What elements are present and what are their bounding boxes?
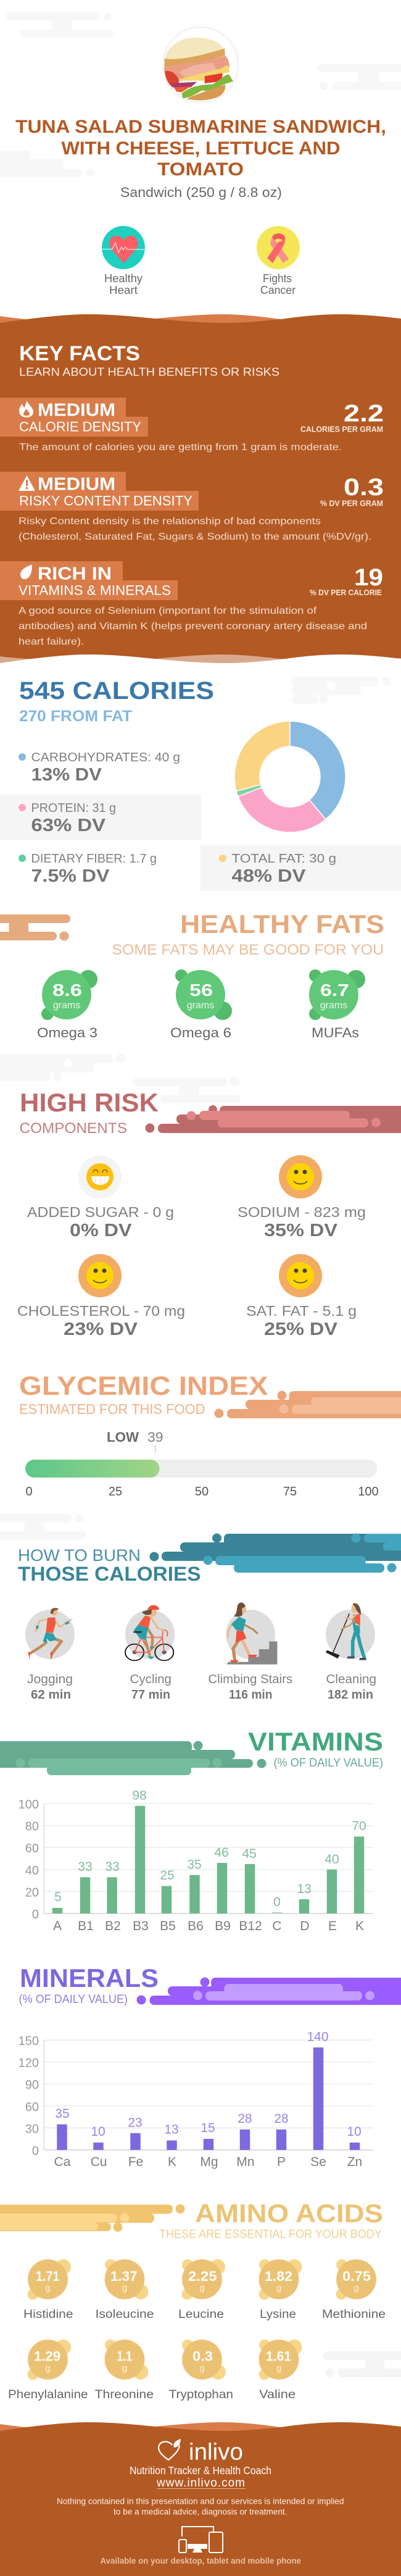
risk item: sodium: 35% DV [264, 1221, 338, 1240]
amino badge: phenylalanine: 1.29 [34, 2349, 60, 2364]
bar chart: minerals: Ca [54, 2155, 71, 2169]
fact: rich in vitamins and minerals: VITAMINS & MINERALS [19, 583, 171, 598]
fact: risky content density: RISKY CONTENT DENSITY [19, 493, 192, 509]
bar chart: minerals: 90 [25, 2078, 39, 2092]
background cloud: burn [0, 1514, 86, 1540]
risk item: sodium: SODIUM - 823 mg [238, 1204, 366, 1220]
bar chart: vitamins: 35 [187, 1858, 202, 1872]
heading: high risk: HIGH RISK [20, 1088, 159, 1117]
bar chart: minerals: Mg [200, 2155, 218, 2169]
fact: risky content density [0, 472, 384, 542]
amino badge: histidine [23, 2259, 73, 2321]
amino badge: methionine: 0.75 [342, 2269, 371, 2284]
disclaimer [57, 2496, 344, 2517]
bar chart: minerals: 150 [19, 2034, 39, 2048]
fact: calorie density: MEDIUM [38, 400, 115, 420]
tagline: Nutrition Tracker & Health Coach [130, 2464, 271, 2477]
fat badge: omega 3: grams [53, 1000, 80, 1011]
bar chart: vitamins: 45 [242, 1847, 257, 1861]
decoration: vitamins banner [0, 1741, 267, 1775]
stat: carbohydrates: CARBOHYDRATES: 40 g [31, 751, 180, 764]
fact: rich in vitamins and minerals [0, 561, 383, 647]
icon: healthy heart: Healthy [104, 272, 143, 285]
title: TOMATO [157, 159, 244, 180]
amino badge: methionine: g [353, 2283, 359, 2293]
bar chart: vitamins: B3 [133, 1919, 149, 1933]
bar chart: vitamins: 98 [132, 1789, 147, 1803]
donut chart: macronutrients [234, 721, 345, 832]
amino badge: methionine [322, 2259, 386, 2321]
bar chart: minerals: K [168, 2155, 176, 2169]
bar chart: vitamins: 70 [352, 1819, 366, 1833]
amino badge: tryptophan [169, 2340, 233, 2401]
amino badge: isoleucine: g [122, 2283, 127, 2293]
heading: high risk: COMPONENTS [20, 1120, 127, 1137]
amino badge: lysine: Lysine [260, 2308, 296, 2321]
bar chart: minerals: 140 [307, 2030, 329, 2044]
amino badge: histidine: g [45, 2283, 51, 2293]
heading: amino acids: THESE ARE ESSENTIAL FOR YOUR BODY [159, 2228, 382, 2241]
gauge: glycemic index: 75 [283, 1485, 297, 1499]
bar chart: vitamins: 25 [160, 1868, 175, 1883]
heading: minerals: (% OF DAILY VALUE) [19, 1993, 128, 2006]
fat badge: MUFAs: MUFAs [312, 1025, 359, 1040]
row highlight: protein [0, 795, 201, 840]
bar chart: minerals: 10 [347, 2125, 362, 2139]
amino badge: leucine: Leucine [178, 2308, 224, 2321]
food photo: sandwich [163, 27, 238, 102]
amino badge: valine: g [276, 2363, 281, 2373]
logo: inlivo: inlivo [189, 2439, 243, 2465]
amino badge: isoleucine: Isoleucine [95, 2308, 154, 2321]
bar chart: vitamins: A [53, 1919, 62, 1933]
fact: risky content density: (Cholesterol, Saturated Fat, Sugars & Sodium) to the amount (%DV/gr). [19, 532, 371, 542]
bar chart: vitamins: K [355, 1919, 364, 1933]
amino badge: isoleucine: 1.37 [110, 2269, 137, 2284]
amino badge: valine: Valine [259, 2388, 296, 2401]
activity: cleaning: Cleaning [326, 1673, 376, 1686]
gauge: glycemic index: 100 [358, 1485, 379, 1499]
bar chart: minerals: 28 [274, 2112, 289, 2126]
bar chart: vitamins: 40 [325, 1852, 339, 1867]
risk item: cholesterol: 23% DV [64, 1319, 138, 1339]
heading: healthy fats: SOME FATS MAY BE GOOD FOR YOU [112, 942, 384, 958]
fact: rich in vitamins and minerals: RICH IN [38, 564, 112, 584]
icon: warning triangle [19, 475, 35, 491]
background cloud: amino acids [323, 2351, 401, 2377]
bar chart: vitamins: 13 [297, 1882, 312, 1896]
bar chart: vitamins: 40 [25, 1864, 39, 1878]
activity: climbing stairs: Climbing Stairs [209, 1673, 292, 1686]
fact: rich in vitamins and minerals: % DV PER CALORIE [310, 588, 382, 597]
gauge: glycemic index: LOW [107, 1429, 139, 1445]
risk item: saturated fat: SAT. FAT - 5.1 g [246, 1303, 357, 1319]
risk item: sodium [238, 1155, 366, 1240]
amino badge: histidine: Histidine [23, 2308, 73, 2321]
amino badge: tryptophan: 0.3 [192, 2349, 213, 2364]
bar chart: minerals: 13 [164, 2123, 179, 2136]
fact: risky content density: MEDIUM [38, 474, 115, 494]
fat badge: omega 3: 8.6 [52, 981, 82, 1000]
heading: calories: 270 FROM FAT [19, 708, 132, 725]
bar chart: vitamins: 20 [25, 1886, 39, 1899]
fact: rich in vitamins and minerals: heart failure). [19, 637, 84, 647]
icon: devices [179, 2527, 223, 2553]
fact: calorie density: CALORIES PER GRAM [300, 425, 383, 433]
bar chart: vitamins: 46 [214, 1846, 229, 1860]
bar chart: vitamins: B5 [160, 1919, 176, 1933]
fat badge: omega 6: Omega 6 [170, 1025, 231, 1040]
serving size: Sandwich (250 g / 8.8 oz) [120, 185, 282, 200]
amino badge: lysine: g [276, 2283, 281, 2293]
activity: cycling: 77 min [131, 1688, 170, 1702]
heading: how to burn [18, 1546, 201, 1585]
bar chart: vitamins: 60 [25, 1842, 39, 1855]
bar chart: vitamins: 0 [273, 1895, 281, 1909]
bar chart: vitamins: B9 [215, 1919, 231, 1933]
bar chart: minerals: 0 [32, 2144, 39, 2158]
bar chart: vitamins: B1 [78, 1919, 94, 1933]
risk item: added sugar: ADDED SUGAR - 0 g [27, 1204, 174, 1220]
heading: calories [19, 677, 214, 725]
gauge: glycemic index: 0 [25, 1485, 33, 1499]
amino badge: isoleucine [95, 2259, 154, 2321]
decoration: high risk banner [146, 1105, 401, 1133]
bar chart: minerals [19, 2030, 373, 2169]
fat badge: omega 3 [37, 970, 97, 1040]
heading: glycemic index: GLYCEMIC INDEX [19, 1371, 268, 1401]
heading: how to burn: HOW TO BURN [18, 1546, 141, 1565]
heading: vitamins: VITAMINS [248, 1727, 383, 1756]
title: WITH CHEESE, LETTUCE AND [62, 138, 341, 159]
heading: high risk [20, 1088, 159, 1137]
bar chart: vitamins: 80 [25, 1820, 39, 1834]
panel: calories [0, 677, 401, 891]
stat: protein: 63% DV [31, 816, 106, 835]
icon: fights cancer [257, 226, 300, 296]
bar chart: minerals: Zn [347, 2155, 362, 2169]
decoration: glycemic banner [215, 1390, 401, 1418]
gauge: glycemic index: 39 [147, 1429, 163, 1445]
stat: total fat [219, 852, 336, 886]
amino badge: tryptophan: Tryptophan [169, 2388, 233, 2401]
fact: calorie density: CALORIE DENSITY [19, 419, 141, 435]
amino badge: leucine [178, 2259, 225, 2321]
activity: cleaning [326, 1604, 376, 1702]
fact: calorie density [0, 398, 384, 453]
fat badge: MUFAs: grams [320, 1000, 347, 1011]
decoration: healthy fats banner [0, 914, 70, 941]
fat badge: omega 6: 56 [189, 981, 213, 1000]
bar chart: minerals: 15 [200, 2121, 215, 2135]
bar chart: minerals: 120 [19, 2057, 39, 2070]
activity: jogging [25, 1608, 75, 1702]
bar chart: vitamins: B2 [105, 1919, 121, 1933]
fat badge: MUFAs [309, 969, 365, 1040]
icon: healthy heart [102, 226, 145, 296]
heading: healthy fats: HEALTHY FATS [180, 910, 384, 939]
bar chart: vitamins: 33 [78, 1860, 93, 1874]
heading: vitamins: (% OF DAILY VALUE) [274, 1757, 383, 1770]
activity: jogging: 62 min [31, 1688, 71, 1702]
gauge: glycemic index: 50 [195, 1485, 209, 1499]
gauge: glycemic index: 25 [109, 1485, 122, 1499]
risk item: saturated fat [246, 1254, 357, 1339]
gauge: glycemic index [25, 1429, 379, 1499]
fact: rich in vitamins and minerals: 19 [354, 564, 383, 591]
risk item: saturated fat: 25% DV [264, 1319, 338, 1339]
decoration: amino acids banner [0, 2204, 185, 2231]
bar chart: minerals: Se [310, 2155, 326, 2169]
bar chart: minerals: Fe [128, 2155, 143, 2169]
fat badge: omega 6 [170, 969, 232, 1040]
bar chart: minerals: 28 [238, 2112, 252, 2126]
amino badge: phenylalanine: g [45, 2363, 51, 2373]
bar chart: vitamins: 0 [32, 1908, 39, 1922]
bar chart: minerals: 35 [55, 2107, 70, 2121]
bar chart: minerals: 30 [25, 2122, 39, 2136]
activity: climbing stairs [209, 1602, 292, 1702]
activity: jogging: Jogging [27, 1673, 73, 1686]
background cloud: calories [292, 677, 391, 704]
fact: risky content density: 0.3 [344, 474, 384, 501]
risk item: added sugar [27, 1155, 174, 1240]
amino badge: valine: 1.61 [266, 2349, 291, 2364]
website link: www.inlivo.com [156, 2477, 245, 2490]
risk item: added sugar: 0% DV [70, 1221, 132, 1240]
bar chart: vitamins: B6 [188, 1919, 204, 1933]
icon: leaf [20, 564, 32, 579]
decoration: minerals banner [137, 1977, 401, 2005]
amino badge: methionine: Methionine [322, 2308, 386, 2321]
activity: cycling [125, 1605, 175, 1702]
stat: total fat: TOTAL FAT: 30 g [232, 852, 336, 866]
disclaimer: to be a medical advice, diagnosis or treatment. [114, 2507, 287, 2517]
stat: dietary fiber: 7.5% DV [31, 866, 110, 886]
bar chart: vitamins: E [328, 1919, 337, 1933]
heading: key facts [19, 342, 279, 378]
fact: calorie density: The amount of calories you are getting from 1 gram is moderate. [19, 442, 342, 453]
bar chart: minerals: Cu [91, 2155, 107, 2169]
fat badge: omega 6: grams [187, 1000, 214, 1011]
title [15, 117, 386, 180]
decoration: burn banner [149, 1534, 401, 1573]
stat: carbohydrates [19, 751, 180, 785]
icon: flame [19, 401, 33, 417]
panel: footer [0, 2422, 401, 2576]
bar chart: vitamins: 100 [19, 1798, 39, 1812]
heading: minerals: MINERALS [20, 1963, 159, 1993]
activity: cycling: Cycling [130, 1673, 172, 1686]
title: TUNA SALAD SUBMARINE SANDWICH, [15, 117, 386, 137]
icon: fights cancer: Cancer [260, 284, 296, 296]
heading: amino acids [159, 2199, 383, 2241]
logo: inlivo [159, 2439, 243, 2465]
amino badge: leucine: g [199, 2283, 205, 2293]
amino badge: leucine: 2.25 [188, 2269, 217, 2284]
heading: vitamins [248, 1727, 383, 1770]
stat: dietary fiber [19, 852, 157, 886]
stat: total fat: 48% DV [232, 866, 306, 886]
risk item: cholesterol: CHOLESTEROL - 70 mg [17, 1303, 185, 1319]
bar chart: minerals: Mn [236, 2155, 255, 2169]
activity: cleaning: 182 min [328, 1688, 373, 1702]
heading: amino acids: AMINO ACIDS [195, 2199, 383, 2228]
fact: calorie density: 2.2 [344, 400, 384, 427]
amino badge: threonine [95, 2340, 154, 2401]
bar chart: vitamins: D [300, 1919, 310, 1933]
heading: minerals [19, 1963, 159, 2006]
heading: key facts: LEARN ABOUT HEALTH BENEFITS OR RISKS [19, 366, 279, 378]
bar chart: minerals: P [277, 2155, 286, 2169]
bar chart: vitamins: B12 [239, 1919, 262, 1933]
heading: calories: 545 CALORIES [19, 677, 214, 705]
heading: glycemic index: ESTIMATED FOR THIS FOOD [19, 1401, 205, 1417]
amino badge: phenylalanine [8, 2340, 88, 2401]
heading: key facts: KEY FACTS [19, 342, 140, 364]
bar chart: vitamins: C [272, 1919, 282, 1933]
stat: carbohydrates: 13% DV [31, 765, 102, 785]
heading: glycemic index [19, 1371, 268, 1417]
disclaimer: Nothing contained in this presentation and our services is intended or implied [57, 2496, 344, 2506]
bar chart: vitamins [19, 1789, 373, 1933]
amino badge: phenylalanine: Phenylalanine [8, 2388, 88, 2401]
fat badge: MUFAs: 6.7 [320, 981, 349, 1000]
fact: risky content density: Risky Content density is the relationship of bad components [19, 516, 321, 527]
fact: rich in vitamins and minerals: antibodies) and Vitamin K (helps prevent coronary artery disease and [19, 621, 367, 632]
bar chart: vitamins: 33 [105, 1860, 120, 1874]
icon: healthy heart: Heart [109, 284, 138, 296]
bar chart: minerals: 23 [128, 2115, 143, 2130]
stat: protein [19, 801, 116, 835]
amino badge: lysine [259, 2259, 302, 2321]
panel: key facts [0, 314, 401, 673]
icon: fights cancer: Fights [263, 272, 292, 285]
amino badge: histidine: 1.71 [36, 2269, 59, 2284]
bar chart: vitamins: 5 [54, 1890, 62, 1904]
fat badge: omega 3: Omega 3 [37, 1025, 97, 1040]
amino badge: threonine: 1.1 [117, 2349, 132, 2364]
stat: protein: PROTEIN: 31 g [31, 801, 116, 815]
bar chart: minerals: 60 [25, 2101, 39, 2114]
background clouds: header [0, 12, 401, 177]
activity: climbing stairs: 116 min [229, 1688, 273, 1702]
amino badge: lysine: 1.82 [265, 2269, 292, 2284]
risk item: cholesterol [17, 1254, 185, 1339]
amino badge: threonine: g [122, 2363, 127, 2373]
amino badge: valine [259, 2340, 302, 2401]
background clouds: high risk [0, 1053, 241, 1103]
fact: rich in vitamins and minerals: A good source of Selenium (important for the stimulation of [19, 606, 317, 616]
amino badge: tryptophan: g [199, 2363, 205, 2373]
fact: risky content density: % DV PER GRAM [320, 499, 383, 508]
row highlight: total fat [200, 845, 401, 891]
stat: dietary fiber: DIETARY FIBER: 1.7 g [31, 852, 157, 866]
heading: how to burn: THOSE CALORIES [18, 1563, 201, 1585]
bar chart: minerals: 10 [91, 2125, 105, 2139]
heading: healthy fats [112, 910, 384, 958]
amino badge: threonine: Threonine [95, 2388, 154, 2401]
availability note: Available on your desktop, tablet and mobile phone [100, 2556, 301, 2566]
